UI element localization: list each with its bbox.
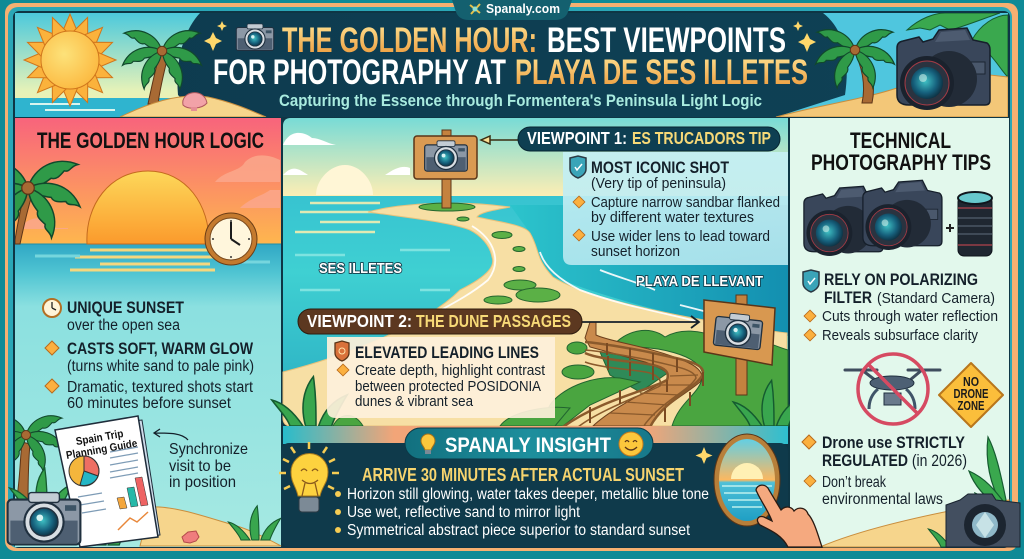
pill: viewpoint 1: VIEWPOINT 1: bbox=[527, 128, 627, 148]
icon: grass tuft bbox=[228, 506, 281, 540]
icon: diamond bullet bbox=[804, 475, 816, 487]
icon: starfish bbox=[182, 531, 199, 543]
text block: viewpoint 1: MOST ICONIC SHOT bbox=[591, 158, 730, 177]
icon: no drone zone diamond bbox=[939, 363, 1003, 427]
pill: viewpoint 2: THE DUNE PASSAGES bbox=[416, 311, 571, 331]
text block: polarizing filter: RELY ON POLARIZING bbox=[824, 270, 978, 289]
icon: seashell bbox=[183, 93, 207, 111]
clouds bbox=[20, 155, 280, 229]
text block: golden hour points bbox=[43, 298, 254, 412]
icon: orange shield bbox=[335, 341, 349, 361]
panel: the golden hour logic bbox=[0, 118, 281, 547]
text block: viewpoint 1: Capture narrow sandbar flanked bbox=[591, 194, 780, 211]
text block: viewpoint 2: Create depth, highlight contrast bbox=[355, 362, 546, 379]
clouds bbox=[283, 133, 410, 175]
title: BEST VIEWPOINTS bbox=[547, 21, 786, 60]
icon: diamond bullet bbox=[804, 329, 816, 341]
callout: synchronize: visit to be bbox=[169, 458, 231, 475]
text block: drone rules: Drone use STRICTLY bbox=[822, 433, 966, 452]
icon: diamond bullet bbox=[573, 196, 585, 208]
header left scene bbox=[15, 13, 266, 117]
pie chart bbox=[69, 456, 99, 486]
text block: insight: Use wet, reflective sand to mirror light bbox=[347, 504, 581, 521]
brand tab bbox=[452, 0, 572, 20]
foam bbox=[430, 226, 735, 322]
icon: no drone zone diamond: ZONE bbox=[958, 398, 985, 413]
icon: grass tuft bbox=[10, 468, 73, 510]
text block: golden hour points: Dramatic, textured shots start bbox=[67, 379, 254, 396]
icon: diamond bullet bbox=[573, 229, 585, 241]
bar chart bbox=[117, 477, 148, 509]
icon: left palm bbox=[15, 415, 64, 498]
text block: viewpoint 1: sunset horizon bbox=[591, 243, 680, 260]
icon: small bulb bbox=[421, 434, 435, 454]
small dune shrubs bbox=[419, 203, 560, 304]
text block: golden hour points: over the open sea bbox=[67, 317, 180, 334]
sand corner bbox=[140, 507, 281, 546]
icon: planning guide document: Planning Guide bbox=[65, 438, 138, 462]
icon: pointing hand bbox=[756, 485, 822, 547]
icon: no drone sign bbox=[845, 354, 940, 424]
icon: plus bbox=[946, 224, 954, 232]
water reflections bbox=[35, 250, 270, 270]
icon: sparkle bbox=[696, 447, 712, 464]
sun on horizon bbox=[316, 165, 373, 195]
text block: drone rules: REGULATED (in 2026) bbox=[822, 451, 967, 470]
icon: mirror with sunset bbox=[714, 434, 780, 526]
text block: drone rules bbox=[802, 433, 967, 508]
heading: TECHNICAL bbox=[850, 128, 951, 153]
callout arrow bbox=[154, 429, 188, 440]
icon: camera bbox=[8, 493, 80, 544]
sand corner bbox=[820, 500, 1009, 547]
callout: synchronize: in position bbox=[169, 474, 236, 491]
icon: sparkles bbox=[204, 21, 816, 52]
text block: viewpoint 1 bbox=[570, 156, 780, 260]
icon: small clock bbox=[43, 299, 61, 317]
vegetation bbox=[333, 330, 788, 426]
icon: setting sun bbox=[87, 171, 209, 244]
icon: smile bbox=[619, 432, 643, 456]
pill: viewpoint 2: VIEWPOINT 2: bbox=[307, 311, 412, 331]
header banner bbox=[15, 13, 1008, 117]
title: FOR PHOTOGRAPHY AT bbox=[213, 53, 506, 92]
text block: insight: Symmetrical abstract piece superior to standard sunset bbox=[347, 522, 691, 539]
text block: drone rules: environmental laws bbox=[822, 491, 943, 508]
text block: viewpoint 2: dunes & vibrant sea bbox=[355, 393, 474, 410]
icon: diamond bullet bbox=[45, 379, 59, 393]
brand tab: Spanaly.com bbox=[486, 2, 560, 16]
sandbar peninsula bbox=[283, 203, 787, 426]
icon: plants bbox=[968, 435, 1007, 501]
text block: polarizing filter: FILTER bbox=[824, 288, 872, 307]
icon: planning guide document: Spain Trip bbox=[75, 428, 125, 448]
text block: golden hour points: UNIQUE SUNSET bbox=[67, 298, 185, 317]
text block: insight: ARRIVE 30 MINUTES AFTER ACTUAL SUNSET bbox=[362, 465, 684, 485]
place label: playa de llevant: PLAYA DE LLEVANT bbox=[636, 273, 763, 290]
icon: planning guide document bbox=[55, 416, 160, 547]
text block: golden hour points: CASTS SOFT, WARM GLOW bbox=[67, 339, 254, 358]
icon: smiling lightbulb bbox=[279, 442, 339, 512]
text block: insight bbox=[335, 465, 709, 539]
icon: title camera bbox=[236, 24, 274, 51]
icon: camera bbox=[946, 494, 1020, 547]
panel: technical photography tips bbox=[790, 118, 1020, 547]
left grass bbox=[272, 377, 347, 426]
subtitle: Capturing the Essence through Formentera's Peninsula Light Logic bbox=[279, 92, 762, 110]
panel: viewpoints map bbox=[272, 118, 803, 427]
icon: diamond bullet bbox=[337, 364, 349, 376]
title: PLAYA DE SES ILLETES bbox=[515, 53, 808, 92]
box: viewpoint 1 details bbox=[563, 152, 788, 265]
icon: palm tree bbox=[119, 26, 205, 104]
text block: viewpoint 2: ELEVATED LEADING LINES bbox=[355, 343, 539, 362]
place label: ses illetes: SES ILLETES bbox=[319, 260, 402, 277]
right grass bbox=[733, 380, 803, 426]
icon: grass by camera bbox=[69, 503, 132, 545]
text block: golden hour points: 60 minutes before sunset bbox=[67, 395, 232, 412]
text block: polarizing filter: (Standard Camera) bbox=[877, 290, 995, 307]
strip between panels bbox=[283, 426, 788, 444]
text block: viewpoint 1: (Very tip of peninsula) bbox=[591, 175, 726, 192]
text block: viewpoint 1: Use wider lens to lead toward bbox=[591, 228, 770, 245]
text block: polarizing filter bbox=[803, 270, 998, 344]
icon: sign 1 bbox=[414, 130, 477, 208]
callout: synchronize bbox=[169, 441, 248, 491]
icon: clock bbox=[205, 213, 257, 265]
icon: no drone zone diamond: NO bbox=[963, 374, 979, 389]
pill: viewpoint 1: ES TRUCADORS TIP bbox=[632, 128, 771, 148]
icon: brand mark bbox=[470, 4, 480, 14]
text block: polarizing filter: Cuts through water reflection bbox=[822, 308, 998, 325]
title bbox=[213, 21, 808, 92]
panel: spanaly insight bbox=[279, 428, 788, 547]
icon: lens filter bbox=[958, 192, 992, 256]
icon: shield bbox=[803, 270, 819, 292]
text block: golden hour points: (turns white sand to pale pink) bbox=[67, 358, 254, 375]
callout: synchronize: Synchronize bbox=[169, 441, 248, 458]
icon: sign 2 bbox=[704, 295, 775, 395]
icon: diamond bullet bbox=[802, 435, 816, 449]
boardwalk bbox=[563, 322, 703, 427]
water reflections bbox=[295, 203, 390, 232]
icon: sun bbox=[24, 14, 116, 106]
pill: insight heading bbox=[405, 428, 653, 459]
icon: no drone zone diamond: DRONE bbox=[954, 386, 989, 401]
icon: diamond bullet bbox=[804, 310, 816, 322]
text block: insight: Horizon still glowing, water takes deeper, metallic blue tone bbox=[347, 486, 709, 503]
pill: viewpoint 2 bbox=[298, 309, 582, 334]
right deep sea bbox=[510, 205, 788, 336]
heading bbox=[811, 128, 991, 175]
pill: insight heading: SPANALY INSIGHT bbox=[445, 434, 611, 457]
icon: grass by camera bbox=[928, 513, 981, 547]
text block: viewpoint 1: by different water textures bbox=[591, 209, 754, 226]
icon: DSLR camera bbox=[897, 28, 990, 110]
title: THE GOLDEN HOUR: bbox=[282, 21, 537, 60]
text block: viewpoint 2: between protected POSIDONIA bbox=[355, 378, 541, 395]
icon: shield bbox=[570, 156, 586, 178]
arrow to sign 2 bbox=[582, 316, 699, 328]
text block: drone rules: Don’t break bbox=[822, 474, 886, 491]
icon: palm tree bbox=[15, 160, 82, 244]
text block: viewpoint 2 bbox=[335, 341, 546, 410]
icon: diamond bullet bbox=[45, 341, 59, 355]
text block: polarizing filter: Reveals subsurface clarity bbox=[822, 327, 978, 344]
pill: viewpoint 1 bbox=[518, 127, 780, 151]
header right scene bbox=[776, 13, 1008, 117]
box: viewpoint 2 details bbox=[327, 337, 555, 418]
icon: two DSLR cameras bbox=[804, 180, 942, 256]
arrow to sign 1 bbox=[481, 136, 520, 144]
heading: THE GOLDEN HOUR LOGIC bbox=[37, 128, 264, 153]
